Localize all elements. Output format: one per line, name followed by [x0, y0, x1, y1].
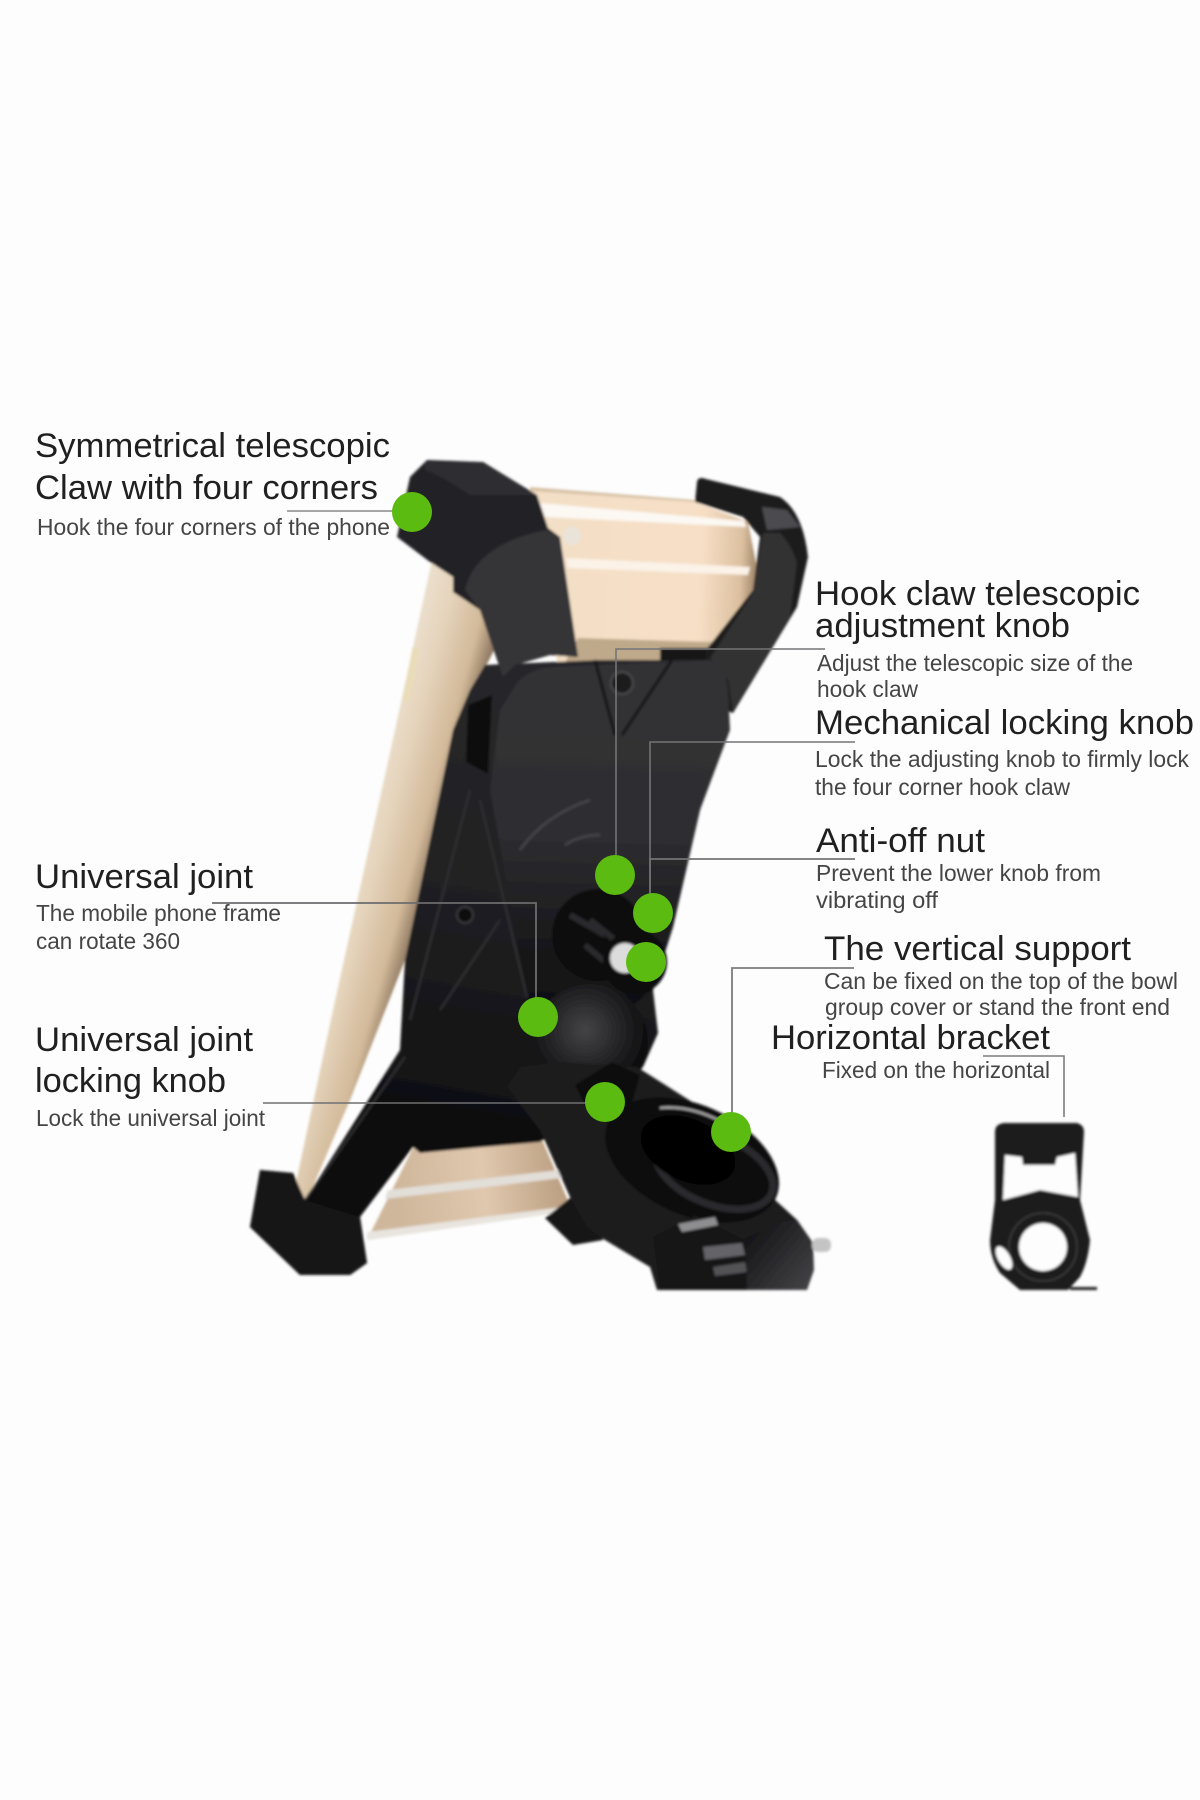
- label: horizontal bracket: [771, 1019, 1051, 1083]
- label: horizontal bracket: Horizontal bracket: [771, 1019, 1051, 1057]
- silver bolt: [812, 1238, 831, 1252]
- phone back upper: [530, 487, 760, 672]
- green marker: telescopic knob: [595, 855, 635, 895]
- green marker: joint locking knob: [585, 1082, 625, 1122]
- label: universal joint: The mobile phone frame: [36, 900, 281, 926]
- tightening knob: [653, 1215, 747, 1290]
- label: vertical support: [824, 930, 1178, 1020]
- label: mechanical locking knob: the four corner hook claw: [815, 774, 1070, 800]
- mount arm: [507, 1062, 813, 1290]
- green marker: universal joint: [518, 997, 558, 1037]
- leader line: joint locking knob: [263, 1102, 590, 1104]
- leader line: vertical support: [732, 968, 854, 1115]
- label: symmetrical telescopic claw: [35, 427, 390, 540]
- green marker: claw: [392, 492, 432, 532]
- product photo: phone holder: [250, 460, 831, 1290]
- leader line: anti-off nut: [650, 859, 855, 897]
- leader line: hook claw knob: [616, 649, 825, 860]
- plate screw: [611, 672, 633, 694]
- right hook claw: [695, 478, 808, 713]
- label: anti-off nut: vibrating off: [816, 887, 939, 913]
- bracket base line: [1070, 1287, 1097, 1290]
- label: vertical support: Can be fixed on the top of the bowl: [824, 968, 1178, 994]
- anti-off nut: [603, 930, 667, 994]
- label: universal joint locking knob: locking knob: [35, 1062, 226, 1100]
- gear knob: [552, 889, 644, 981]
- bracket ring inner rim: [1009, 1213, 1077, 1281]
- label: vertical support: group cover or stand the front end: [825, 994, 1170, 1020]
- slot in body: [466, 695, 492, 774]
- ball joint: [532, 984, 648, 1100]
- leader line: horizontal bracket: [983, 1056, 1064, 1117]
- engraved arcs: [520, 800, 600, 850]
- green marker: locking knob: [633, 893, 673, 933]
- body ridges: [305, 790, 527, 1200]
- side screw: [457, 907, 473, 923]
- label: symmetrical telescopic claw: Claw with four corners: [35, 469, 378, 507]
- label: mechanical locking knob: Mechanical locking knob: [815, 704, 1194, 742]
- label: mechanical locking knob: Lock the adjusting knob to firmly lock: [815, 746, 1189, 772]
- phone side button: [405, 648, 417, 702]
- label: universal joint: Universal joint: [35, 858, 254, 896]
- label: anti-off nut: Anti-off nut: [816, 822, 986, 860]
- label: mechanical locking knob: [815, 704, 1194, 800]
- leader line: claw: [287, 510, 395, 512]
- clamp ring: [586, 1072, 798, 1248]
- phone back lower: [367, 1135, 572, 1240]
- bracket window: [1003, 1153, 1078, 1200]
- label: hook claw telescopic adjustment knob: Adjust the telescopic size of the: [817, 650, 1133, 676]
- lower clip behind mount: [545, 1198, 603, 1245]
- label: horizontal bracket: Fixed on the horizontal: [822, 1057, 1050, 1083]
- label: hook claw telescopic adjustment knob: adjustment knob: [815, 607, 1070, 645]
- plate V notch: [595, 660, 672, 735]
- bracket lower slit: [992, 1244, 1016, 1272]
- foot face: [250, 1170, 367, 1275]
- label: anti-off nut: Prevent the lower knob from: [816, 860, 1101, 886]
- leader line: locking knob: [650, 742, 855, 859]
- label: symmetrical telescopic claw: Symmetrical telescopic: [35, 427, 390, 465]
- bracket ring hole: [1019, 1223, 1067, 1271]
- label: universal joint: [35, 858, 281, 954]
- knob lock block: [575, 1062, 640, 1115]
- upper left hook claw: [397, 460, 578, 677]
- label: hook claw telescopic adjustment knob: hook claw: [817, 676, 918, 702]
- label: hook claw telescopic adjustment knob: [815, 575, 1140, 702]
- label: symmetrical telescopic claw: Hook the four corners of the phone: [37, 514, 390, 540]
- label: universal joint locking knob: Lock the universal joint: [36, 1105, 266, 1131]
- bracket side view icon: [990, 1123, 1097, 1290]
- green marker: vertical support: [711, 1112, 751, 1152]
- central back plate: [490, 660, 730, 1030]
- label: anti-off nut: [816, 822, 1101, 913]
- label: universal joint locking knob: [35, 1021, 266, 1131]
- label: universal joint: can rotate 360: [36, 928, 180, 954]
- label: universal joint locking knob: Universal joint: [35, 1021, 254, 1059]
- label: vertical support: The vertical support: [824, 930, 1132, 968]
- green marker: anti-off nut: [626, 942, 666, 982]
- leader line: universal joint: [212, 903, 536, 1000]
- tightening knob cylinder: [745, 1220, 814, 1290]
- body and lower left foot: [250, 660, 730, 1275]
- phone side edge: [295, 560, 520, 1205]
- label: hook claw telescopic adjustment knob: Hook claw telescopic: [815, 575, 1140, 613]
